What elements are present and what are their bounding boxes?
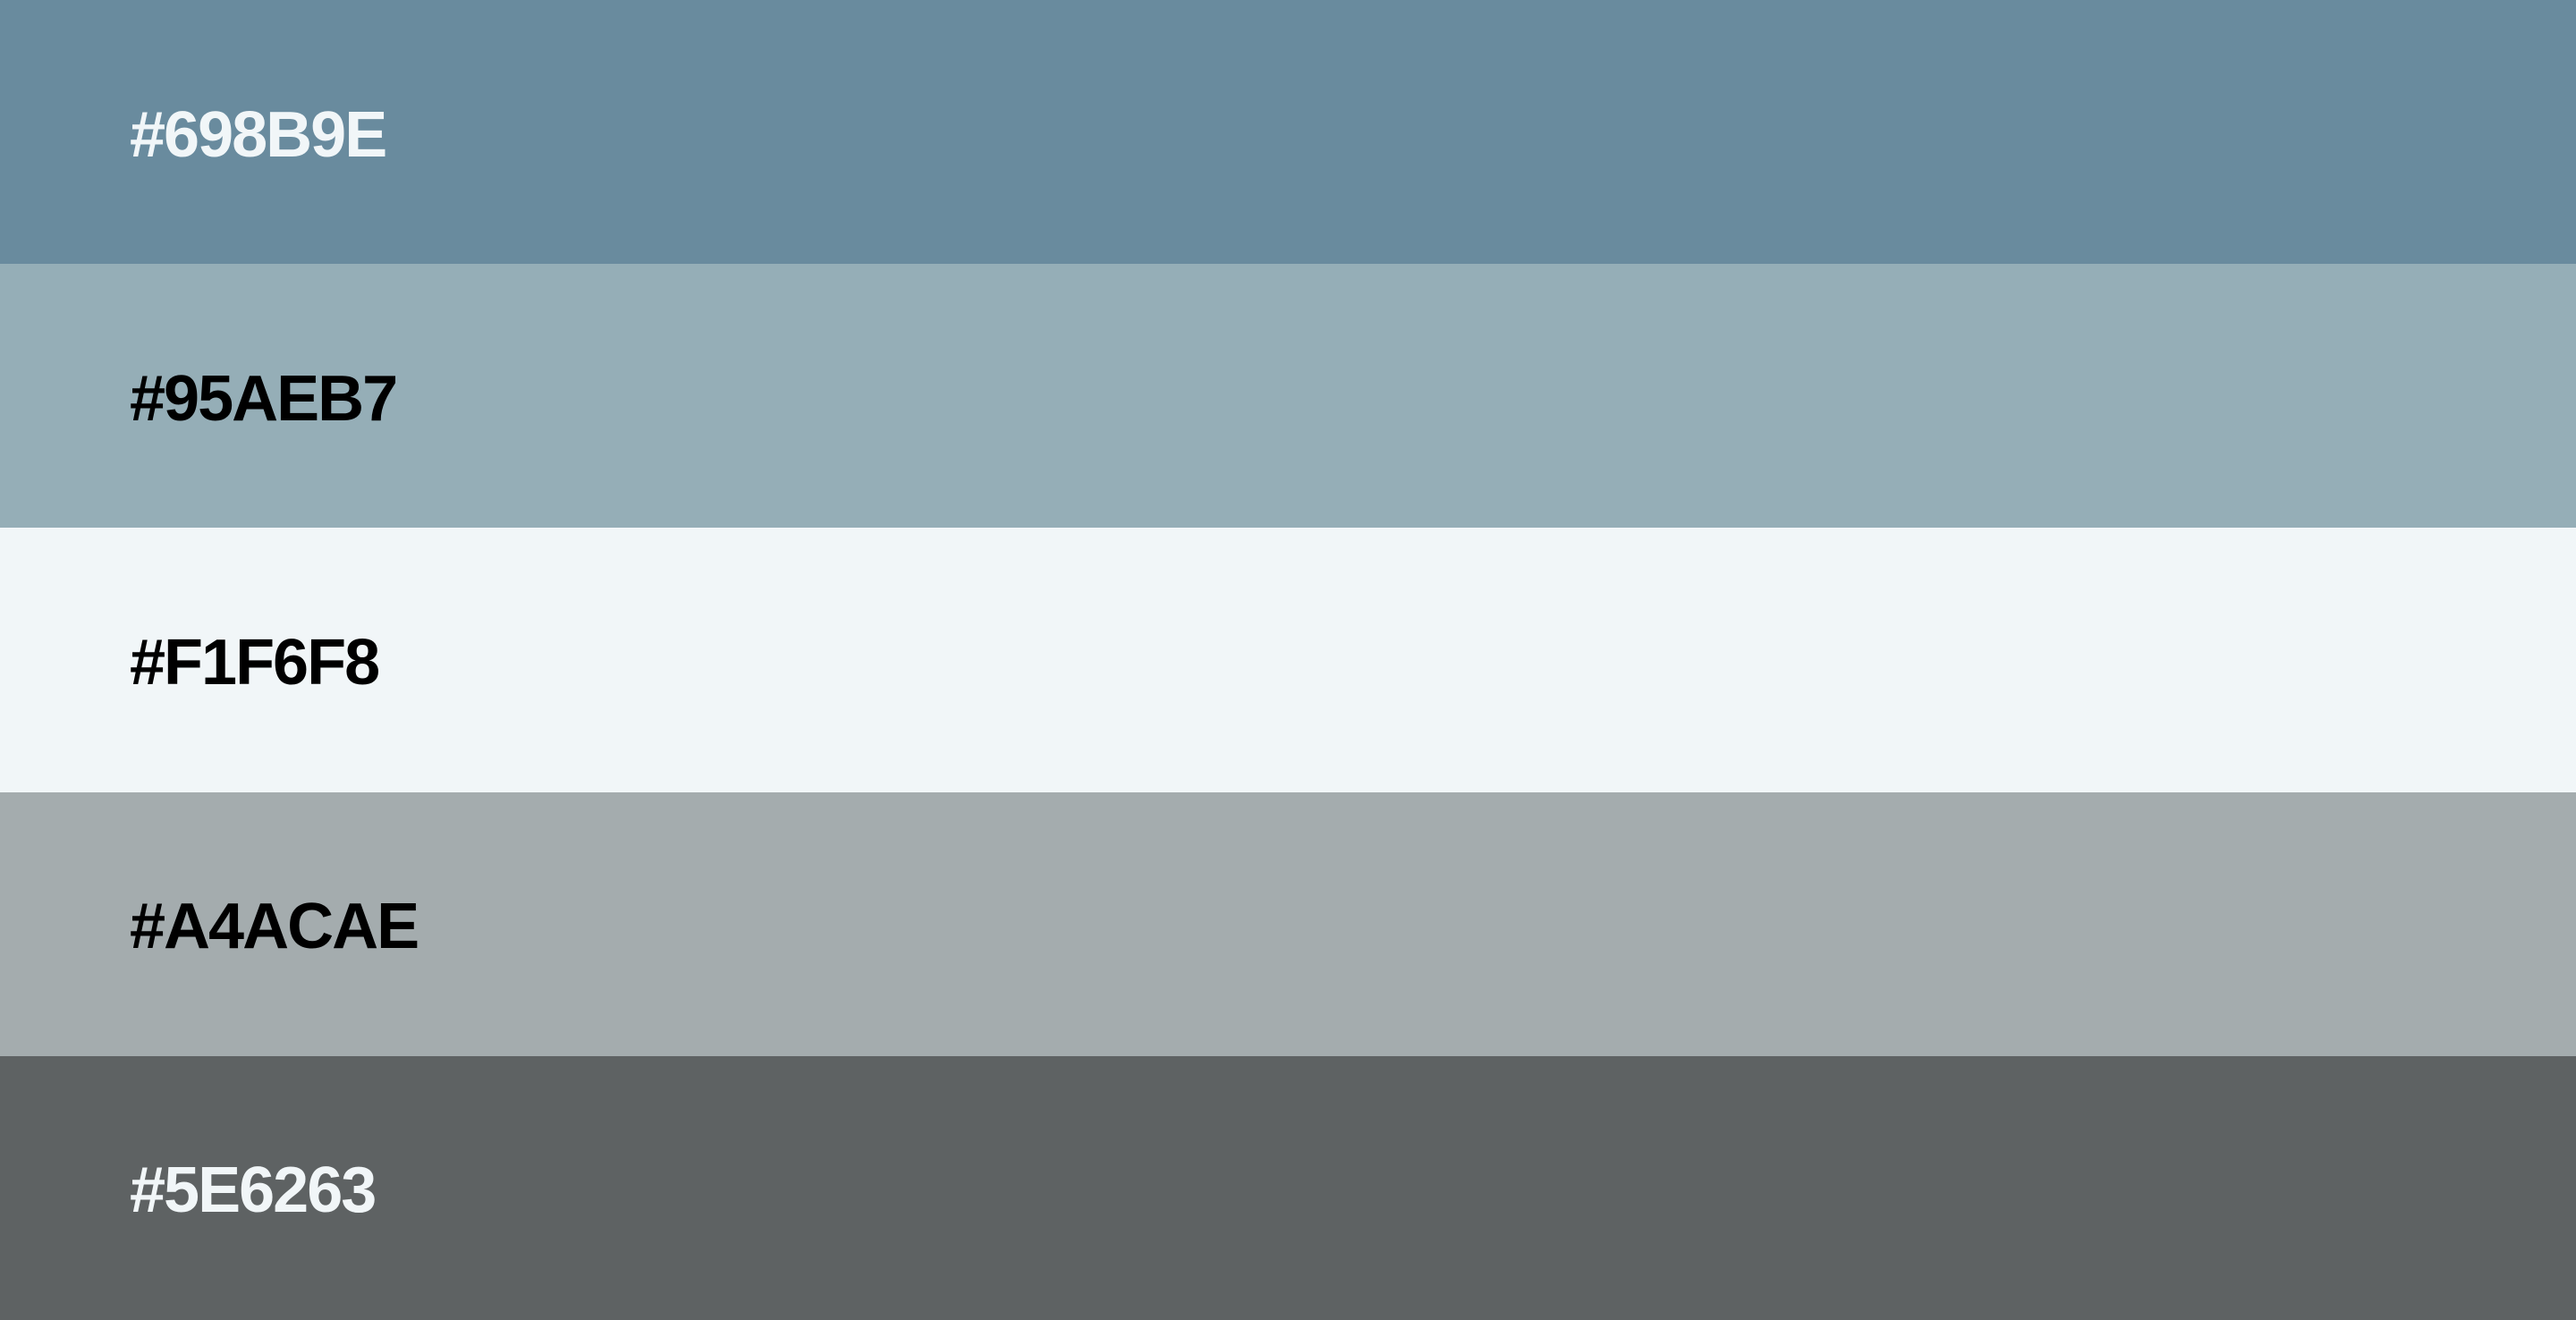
text: hex code A4ACAE: #A4ACAE: [130, 891, 418, 962]
text: hex code F1F6F8: #F1F6F8: [130, 627, 378, 698]
text: hex code 5E6263: #5E6263: [130, 1155, 375, 1226]
panel: swatch 5E6263: [0, 1056, 2576, 1320]
panel: swatch A4ACAE: [0, 792, 2576, 1056]
panel: swatch 698B9E: [0, 0, 2576, 264]
panel: swatch 95AEB7: [0, 264, 2576, 528]
text: hex code 698B9E: #698B9E: [130, 98, 386, 170]
text: hex code 95AEB7: #95AEB7: [130, 363, 396, 435]
panel: swatch F1F6F8: [0, 528, 2576, 792]
